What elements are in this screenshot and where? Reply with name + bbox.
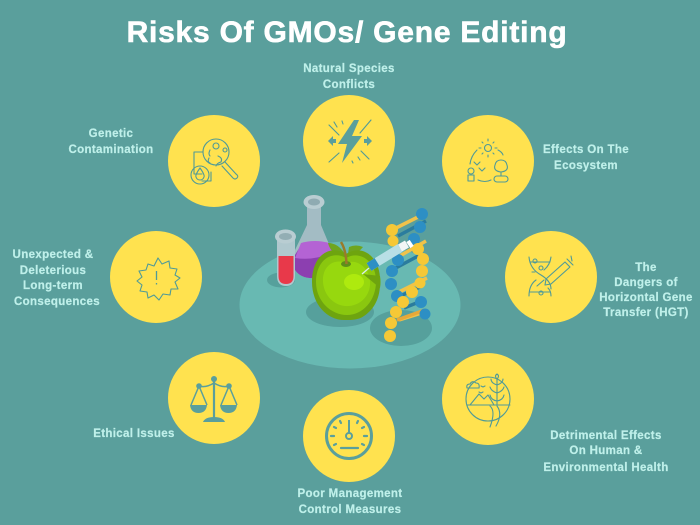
title: Risks Of GMOs/ Gene Editing (127, 16, 567, 49)
icon: flask (294, 195, 333, 278)
label: Ecosystem (554, 160, 618, 172)
label: Poor Management (298, 488, 402, 500)
icon: green apple (312, 242, 380, 320)
label: The (635, 262, 657, 274)
circle (303, 95, 395, 187)
label: Unexpected & (13, 249, 93, 261)
label: Consequences (14, 296, 100, 308)
label: Environmental Health (543, 462, 669, 474)
icon: gauge (326, 414, 372, 458)
central ellipse platform (240, 242, 460, 368)
icon: lightning with arrows (328, 120, 372, 163)
label: Long-term (23, 280, 83, 292)
icon: syringe (362, 241, 412, 274)
label: Conflicts (323, 79, 375, 91)
icon: scales (190, 376, 237, 422)
node: Dangers of Horizontal Gene Transfer (505, 231, 693, 323)
icon: DNA with syringe (529, 256, 573, 296)
label: Natural Species (303, 63, 395, 75)
icon: DNA helix (384, 208, 430, 342)
label: Control Measures (299, 504, 401, 516)
node: Poor Management Control Measures (298, 390, 402, 516)
node: Natural Species Conflicts (303, 63, 395, 187)
icon: test tube (275, 230, 296, 286)
icon: exclamation burst (137, 258, 180, 300)
node: Genetic Contamination (68, 115, 260, 207)
icon: ecosystem cycle (468, 139, 508, 182)
label: On Human & (569, 445, 643, 457)
icon: magnifier with microbes and drop (191, 139, 238, 184)
illustration: lab glassware, apple and DNA (267, 195, 432, 346)
shadows (267, 272, 432, 346)
label: Deleterious (20, 265, 86, 277)
label: Contamination (68, 144, 154, 156)
node: Effects On The Ecosystem (442, 115, 629, 207)
label: Genetic (89, 128, 134, 140)
label: Ethical Issues (93, 428, 175, 440)
label: Horizontal Gene (599, 292, 693, 304)
label: Detrimental Effects (550, 430, 662, 442)
label: Dangers of (614, 277, 678, 289)
node: Ethical Issues (93, 352, 260, 444)
node: Detrimental Effects (442, 353, 669, 474)
label: Effects On The (543, 144, 629, 156)
node: Unexpected Consequences (13, 231, 202, 323)
label: Transfer (HGT) (603, 307, 689, 319)
icon: landscape with wheat (466, 374, 510, 427)
